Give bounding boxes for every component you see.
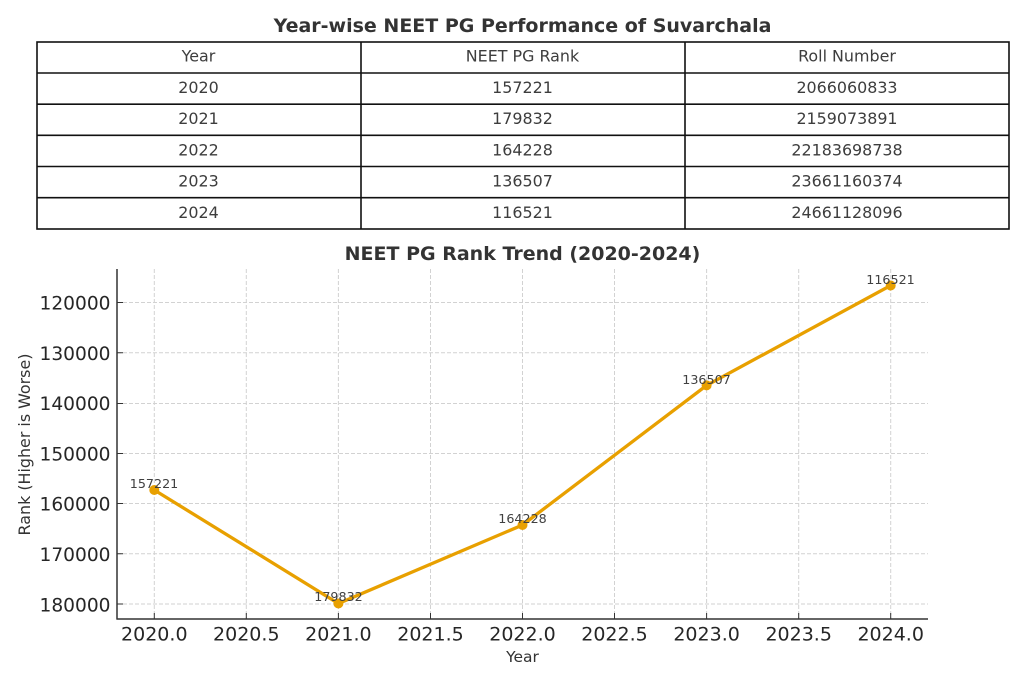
table header row: Roll Number [798, 46, 896, 66]
row 2022: 164228 [492, 140, 553, 160]
x axis tick labels: 2024.0 [857, 624, 924, 646]
row 2020: 2020 [178, 78, 219, 97]
row 2021: 2159073891 [796, 109, 898, 128]
x axis tick labels: 2020.5 [213, 624, 280, 646]
y axis tick labels [40, 294, 110, 616]
row 2022: 2022 [178, 140, 219, 160]
row 2022 [178, 140, 903, 160]
row 2024: 2024 [178, 203, 219, 222]
axes [116, 269, 928, 620]
y axis tick labels: 120000 [40, 294, 110, 314]
data labels [130, 272, 915, 604]
data labels: 136507 [682, 372, 731, 387]
data labels: 116521 [866, 272, 915, 287]
data labels: 157221 [130, 476, 178, 491]
x axis tick labels: 2022.5 [581, 624, 648, 646]
row 2023: 23661160374 [791, 172, 903, 190]
row 2024 [178, 203, 903, 222]
table title: Year-wise NEET PG Performance of Suvarchala [273, 15, 771, 37]
x axis label: Year [505, 648, 540, 666]
row 2021: 179832 [492, 109, 553, 128]
rank trend line [149, 280, 896, 608]
row 2021 [178, 109, 898, 128]
y axis tick labels: 130000 [40, 344, 110, 365]
row 2020: 157221 [492, 78, 553, 97]
line chart [15, 269, 928, 666]
y axis tick labels: 180000 [40, 596, 110, 616]
row 2023: 2023 [178, 172, 219, 190]
row 2024: 24661128096 [791, 203, 903, 222]
x axis tick labels: 2023.0 [673, 624, 740, 646]
y axis tick labels: 160000 [40, 494, 110, 516]
y axis tick labels: 150000 [40, 444, 110, 466]
data labels: 179832 [314, 589, 363, 604]
table header row [181, 46, 896, 66]
data labels: 164228 [498, 511, 547, 526]
row 2024: 116521 [492, 203, 553, 222]
x axis tick labels: 2021.5 [397, 624, 464, 646]
row 2023: 136507 [492, 172, 553, 190]
x axis tick labels: 2022.0 [489, 624, 556, 646]
x axis tick labels: 2023.5 [765, 624, 832, 646]
chart title: NEET PG Rank Trend (2020-2024) [345, 243, 700, 265]
y axis tick labels: 170000 [40, 545, 110, 566]
table header row: NEET PG Rank [466, 46, 580, 66]
x axis tick labels: 2021.0 [305, 624, 372, 646]
row 2020 [178, 78, 898, 97]
x axis tick labels [121, 624, 924, 646]
row 2020: 2066060833 [796, 78, 898, 97]
x axis tick labels: 2020.0 [121, 624, 188, 646]
y axis label: Rank (Higher is Worse) [15, 354, 34, 535]
y axis tick labels: 140000 [40, 394, 110, 415]
table header row: Year [181, 46, 216, 66]
performance table [37, 42, 1009, 229]
row 2022: 22183698738 [791, 140, 903, 160]
row 2021: 2021 [178, 109, 219, 128]
row 2023 [178, 172, 903, 190]
